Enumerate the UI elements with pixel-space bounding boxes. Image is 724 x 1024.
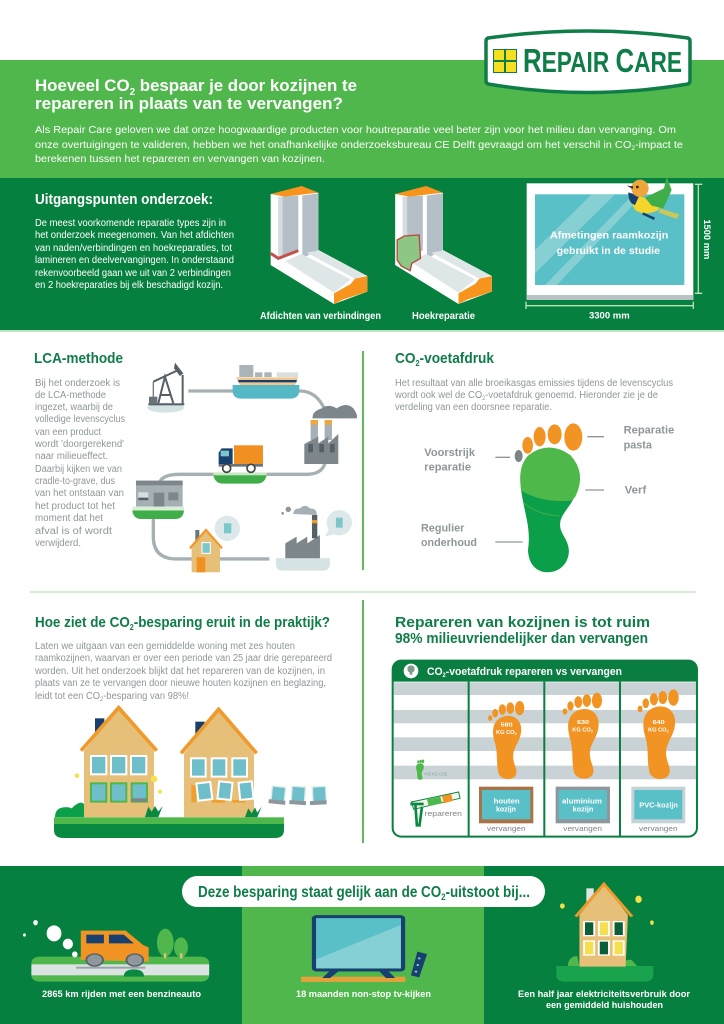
title: [35, 76, 357, 113]
body text: verwijderd.: [35, 538, 81, 549]
title: Hoeveel CO: [35, 76, 130, 95]
leader lines: [495, 437, 604, 542]
window label: gebruikt in de studie: [557, 246, 660, 257]
body text: verdeling van een doorsnee reparatie.: [395, 402, 552, 413]
primer segment: [515, 450, 523, 462]
icon: yellow window: [493, 49, 517, 73]
body text: worden. Uit het onderzoek blijkt dat het repareren van de kozijnen, in: [34, 666, 325, 677]
footprint: PVC: [638, 689, 679, 779]
label: voorstrijk reparatie: reparatie: [424, 462, 471, 474]
repair footprint: [416, 760, 448, 780]
title: bespaar je door kozijnen te: [135, 76, 357, 95]
body text: lamineren en deelvervangingen. In onderstaand: [35, 255, 234, 266]
panel: header band: [0, 60, 724, 178]
body text: Daarbij kijken we van: [35, 464, 122, 475]
chart frame: [393, 661, 697, 837]
icon: house: [190, 516, 240, 572]
body text: volledige levenscyclus: [35, 414, 125, 425]
footprint: houten: 2: [515, 732, 517, 736]
window: aluminium kozijn: kozijn: [573, 804, 594, 813]
body text: -besparing van 98%!: [103, 691, 189, 702]
heading: CO: [395, 350, 418, 367]
repair footprint: <50 KG CO2: [424, 772, 448, 777]
body text: leidt tot een CO: [35, 691, 104, 702]
body text: Het resultaat van alle broeikasgas emissies tijdens de levenscyclus: [395, 378, 673, 389]
dimension lines: [526, 184, 702, 309]
heading: 2: [416, 359, 420, 368]
heading: LCA-methode: [34, 350, 123, 367]
ground: [54, 803, 284, 838]
divider: [362, 351, 364, 570]
window label: [550, 230, 668, 257]
logo wordmark: REPAIR CARE: [523, 42, 682, 79]
body text: wordt 'doorgerekend': [34, 439, 124, 450]
label: voorstrijk reparatie: Voorstrijk: [424, 447, 476, 459]
caption: household: een gemiddeld huishouden: [546, 1000, 663, 1011]
label: verf: Verf: [625, 485, 647, 497]
heading: Hoe ziet de CO: [35, 614, 141, 631]
body text: [35, 218, 234, 291]
body text: de LCA-methode: [35, 390, 106, 401]
footprint: houten: KG CO: [496, 730, 515, 736]
body text: wordt ook wel de CO: [395, 390, 488, 401]
panel: LCA-methode: [34, 350, 357, 572]
body text: afval is of wordt: [35, 526, 112, 537]
callout pill: Deze besparing staat gelijk aan de CO: [198, 884, 487, 901]
gray stripes: [394, 682, 696, 779]
panel: CO2-voetafdruk: [394, 350, 674, 572]
label: reparatie pasta: pasta: [624, 440, 653, 452]
heading: -besparing eruit in de praktijk?: [134, 614, 330, 631]
intro text: 2: [631, 146, 636, 152]
caption: Hoekreparatie: [412, 311, 475, 322]
body text: -voetafdruk genoemd. Hieronder zie je de: [485, 390, 658, 401]
label: regulier onderhoud: Regulier: [421, 522, 465, 534]
window: houten kozijn: houten: [494, 796, 520, 805]
body text: raamkozijnen, waarvan er over een periode van 25 jaar drie gerepareerd: [35, 653, 332, 664]
footprint chart: [421, 423, 674, 572]
icon: oil pump: [147, 363, 184, 413]
window: PVC kozijn: PVC-kozijn: [639, 800, 678, 809]
footprint: PVC: KG CO: [648, 728, 667, 734]
icon: car: [23, 920, 209, 982]
icon: discarded windows: [271, 786, 326, 802]
icon: waste plant: [276, 506, 352, 571]
intro text: Als Repair Care geloven we dat onze hoogwaardige producten voor houtreparatie veel beter zijn voor het milieu dan vervanging. Om: [35, 125, 676, 136]
label: regulier onderhoud: [421, 522, 477, 549]
window: aluminium kozijn: [556, 787, 610, 833]
intro text: -impact te: [635, 140, 683, 151]
label: regulier onderhoud: onderhoud: [421, 537, 477, 549]
logo: Repair Care: [486, 31, 690, 92]
title: 2: [130, 87, 136, 98]
chart header: CO: [427, 666, 443, 678]
dimension 1500: 1500 mm: [702, 219, 712, 259]
panel: CO2-besparing in de praktijk: [34, 614, 332, 838]
body text: [34, 641, 332, 703]
heading: 98% milieuvriendelijker dan vervangen: [395, 630, 648, 647]
icon: truck: [213, 445, 267, 484]
window: houten kozijn: [479, 787, 533, 833]
caption: household: [518, 989, 690, 1011]
footprint: aluminium: 630: [577, 720, 589, 726]
icon: factory with smoke: [304, 405, 357, 464]
heading: [395, 614, 650, 647]
footprint: houten: [488, 701, 524, 779]
body text: ingezet, waarbij de: [35, 402, 113, 413]
callout pill: -uitstoot bij...: [445, 884, 530, 901]
icon: bird: [627, 177, 679, 220]
panel: uitgangspunten onderzoek: [0, 177, 724, 332]
window: houten kozijn: kozijn: [496, 804, 516, 813]
icon: ship: [233, 365, 299, 399]
caption: car: 2865 km rijden met een benzineauto: [42, 989, 201, 1000]
comparison chart: [393, 660, 697, 837]
label: reparatie pasta: Reparatie: [624, 425, 674, 437]
toes: [522, 423, 582, 454]
body text: plaats van ze te vervangen door nieuwe houten kozijnen en beglazing,: [35, 678, 326, 689]
footprint: aluminium: 2: [591, 730, 593, 734]
title: repareren in plaats van te vervangen?: [35, 94, 343, 113]
footprint: houten: 580: [501, 722, 513, 728]
icon: replaced house: [181, 709, 262, 817]
chart header: -voetafdruk repareren vs vervangen: [446, 666, 622, 678]
footprint: PVC: 2: [667, 730, 669, 734]
footprint: PVC: 640: [653, 720, 665, 726]
body text: 2: [482, 396, 486, 402]
icon: house: [556, 884, 654, 982]
body text: [394, 378, 673, 413]
footprint: aluminium: KG CO: [572, 728, 591, 734]
window: aluminium kozijn: aluminium: [562, 796, 602, 805]
heading: 2: [130, 623, 134, 632]
footprint: aluminium: [563, 693, 602, 779]
icon: repaired house: [75, 708, 163, 817]
panel: repareren vs vervangen: [393, 614, 697, 837]
body text: van een product: [35, 427, 101, 438]
body text: rekenvoorbeeld gaan we uit van 2 verbindingen: [35, 268, 231, 279]
heading: Uitgangspunten onderzoek:: [35, 191, 213, 208]
chart header: [393, 660, 697, 682]
intro text: [35, 125, 683, 165]
paint segment: [520, 447, 580, 501]
body text: van naden/verbindingen en hoekreparaties, tot: [35, 243, 232, 254]
body text: 2: [100, 697, 104, 703]
window: PVC kozijn: vervangen: [639, 826, 678, 833]
body text: Laten we uitgaan van een gemiddelde woning met zes houten: [35, 641, 295, 652]
lifecycle diagram: [132, 363, 357, 572]
body text: [34, 378, 125, 549]
window: PVC kozijn: [631, 787, 685, 833]
window label: Afmetingen raamkozijn: [550, 230, 668, 241]
body text: naar milieueffect.: [35, 451, 108, 462]
houses illustration: [54, 708, 327, 838]
window dimensions diagram: [526, 177, 712, 320]
heading: Repareren van kozijnen is tot ruim: [395, 614, 650, 631]
body text: moment dat het: [35, 513, 103, 524]
caption: Afdichten van verbindingen: [260, 311, 381, 322]
icon: window corner repair: [395, 186, 492, 304]
icon: television: [301, 917, 427, 982]
body text: cradle-to-grave, dus: [35, 476, 115, 487]
window: aluminium kozijn: vervangen: [563, 826, 602, 833]
callout pill: [182, 876, 545, 907]
body text: en 2 hoekreparaties bij elk beschadigd kozijn.: [35, 280, 223, 291]
body text: Bij het onderzoek is: [35, 378, 120, 389]
connecting route: [153, 391, 325, 559]
dimension 3300: 3300 mm: [589, 310, 630, 320]
intro text: berekenen tussen het repareren en vervangen van kozijnen.: [35, 154, 325, 165]
heading: -voetafdruk: [420, 350, 495, 367]
body text: het product tot het: [35, 501, 115, 512]
icon: caulk gun: [410, 792, 462, 827]
body text: het onderzoek meegenomen. Van het afdichten: [35, 230, 234, 241]
label: voorstrijk reparatie: [424, 447, 476, 474]
chart header: 2: [443, 673, 446, 679]
window: houten kozijn: vervangen: [487, 826, 526, 833]
body text: van het ontstaan van: [35, 488, 124, 499]
label: reparatie pasta: [624, 425, 674, 452]
callout pill: 2: [441, 892, 445, 902]
caption: tv: 18 maanden non-stop tv-kijken: [296, 989, 431, 1000]
panel: footer equivalents: [0, 866, 724, 1024]
maintenance segment: [521, 487, 575, 572]
body text: De meest voorkomende reparatie types zijn in: [35, 218, 226, 229]
icon: warehouse: [132, 481, 184, 519]
intro text: onze overtuigingen te valideren, hebben we het onafhankelijke onderzoeksbureau CE Delft gevraagd om het verschil in CO: [35, 140, 580, 151]
caption: household: Een half jaar elektriciteitsverbruik door: [518, 989, 690, 1000]
icon: window corner seal: [271, 186, 367, 304]
icon: caulk gun: repareren: [425, 811, 462, 818]
